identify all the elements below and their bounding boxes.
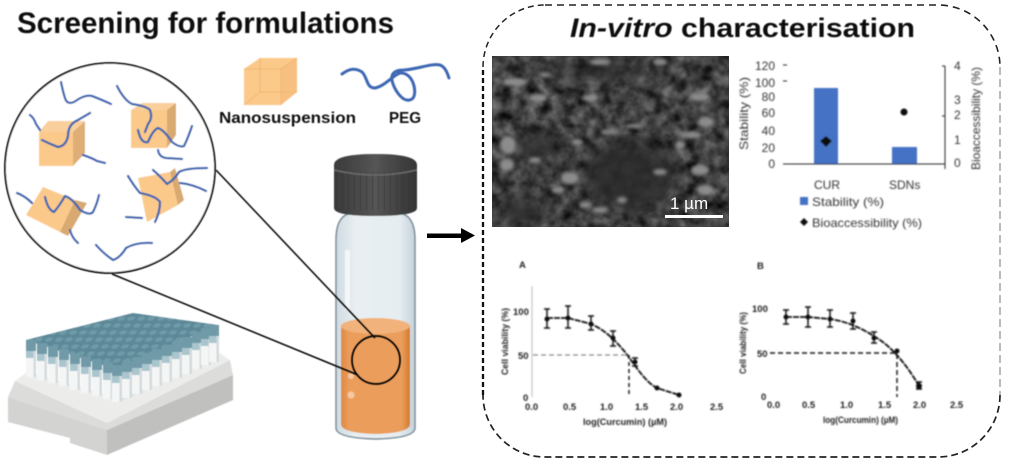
- y axis labels: 0: [761, 392, 766, 403]
- heading: Screening for formulations: Screening for formulations: [17, 7, 394, 40]
- y axis labels: 0: [523, 393, 528, 404]
- category labels: [814, 178, 920, 192]
- icon: nanosuspension cube: [244, 58, 297, 105]
- vial block background: [26, 313, 218, 402]
- x axis labels: 1.0: [840, 400, 853, 411]
- left axis tick labels: [755, 59, 775, 171]
- left axis tick labels: 100: [755, 76, 775, 90]
- dose response chart A: [500, 260, 724, 428]
- data points: [544, 316, 682, 398]
- x axis labels: 1.0: [600, 402, 613, 413]
- error bars: [544, 306, 638, 366]
- y axis labels: 100: [513, 307, 529, 318]
- zoom lines and small circle on vial: [112, 170, 400, 384]
- y axis labels: [500, 307, 529, 404]
- bar chart: stability and bioaccessibility: [737, 59, 983, 230]
- x axis labels: 1.5: [878, 400, 892, 411]
- left axis tick labels: 0: [768, 157, 775, 171]
- PEG strands: [17, 82, 207, 260]
- left axis tick labels: 120: [755, 59, 775, 73]
- right axis tick labels: 2: [954, 108, 961, 122]
- x axis labels: [525, 402, 724, 428]
- left axis tick labels: 80: [762, 90, 775, 104]
- cube 4: [138, 168, 184, 222]
- x axis labels: 0.5: [802, 400, 816, 411]
- rack base: [8, 352, 233, 455]
- y axis labels: [738, 304, 768, 403]
- y axis labels: Cell viability (%): [738, 312, 749, 374]
- x axis labels: 0.5: [563, 402, 577, 413]
- x axis labels: 0.0: [525, 402, 538, 413]
- x axis labels: log(Curcumin) (µM): [583, 417, 667, 428]
- label: PEG: PEG: [389, 110, 421, 127]
- left axis tick labels: 60: [762, 106, 775, 120]
- legend: nanosuspension and PEG: [219, 58, 449, 127]
- cube 1: [39, 121, 85, 166]
- x axis labels: 2.5: [950, 400, 964, 411]
- SEM micrograph: [492, 56, 729, 227]
- cube 2: [131, 103, 176, 148]
- vial rack: [8, 313, 233, 455]
- IC50 guide lines: [770, 353, 897, 397]
- x axis labels: 2.5: [710, 402, 724, 413]
- orange liquid: [341, 250, 410, 434]
- dose response chart B: [738, 261, 964, 426]
- x axis labels: [767, 400, 964, 426]
- panel letter A: A: [519, 260, 526, 271]
- heading: In-vitro characterisation: In-vitro characterisation: [570, 13, 915, 43]
- x axis labels: 0.0: [767, 400, 780, 411]
- scale label: 1 µm: 1 µm: [670, 194, 708, 213]
- panel: in-vitro characterisation: [483, 5, 1000, 457]
- right axis tick labels: 1: [954, 133, 961, 147]
- x axis labels: log(Curcumin) (µM): [823, 415, 898, 426]
- data points: [784, 314, 922, 389]
- x axis labels: 2.0: [913, 400, 926, 411]
- bioaccessibility points: [820, 108, 908, 147]
- error bars: [783, 307, 922, 389]
- dose response curve: [547, 318, 679, 395]
- y axis: [531, 286, 533, 397]
- right axis tick labels: 4: [954, 59, 961, 73]
- left axis title: Stability (%): [737, 77, 751, 150]
- scale bar: [665, 215, 723, 218]
- magnified view of formulation: [5, 63, 215, 273]
- y axis labels: 100: [752, 304, 768, 315]
- arrow to in-vitro panel: [427, 228, 475, 243]
- y axis labels: 50: [757, 349, 768, 360]
- left axis tick labels: 20: [762, 141, 775, 155]
- bright particles: [500, 59, 714, 213]
- axes: [783, 65, 945, 169]
- y axis labels: 50: [518, 351, 529, 362]
- category labels: SDNs: [889, 178, 920, 192]
- bars: [814, 88, 917, 164]
- left axis tick labels: 40: [762, 124, 775, 138]
- black screw cap: [334, 154, 417, 216]
- legend: [800, 195, 922, 230]
- label: Nanosuspension: Nanosuspension: [219, 110, 356, 127]
- legend: Bioaccessibility (%): [812, 216, 922, 230]
- dose response curve: [786, 317, 919, 386]
- right axis title: Bioaccessibility (%): [969, 67, 983, 170]
- right axis tick labels: [954, 59, 961, 170]
- legend: Stability (%): [812, 195, 884, 209]
- dark regions: [496, 62, 678, 225]
- y axis labels: Cell viability (%): [500, 308, 511, 375]
- IC50 guide lines: [533, 354, 629, 356]
- magnifier circle: [5, 63, 215, 273]
- glass body: [336, 213, 415, 439]
- rows of vials: [26, 325, 219, 402]
- icon: PEG strand: [342, 65, 449, 100]
- panel letter B: B: [757, 261, 764, 272]
- right axis tick labels: 3: [954, 93, 961, 107]
- vial tops: [26, 313, 218, 368]
- cube 3: [26, 187, 87, 236]
- right axis tick labels: 0: [954, 156, 961, 170]
- x axis labels: 2.0: [670, 402, 683, 413]
- large vial: [334, 154, 417, 439]
- category labels: CUR: [814, 178, 840, 192]
- x axis labels: 1.5: [635, 402, 649, 413]
